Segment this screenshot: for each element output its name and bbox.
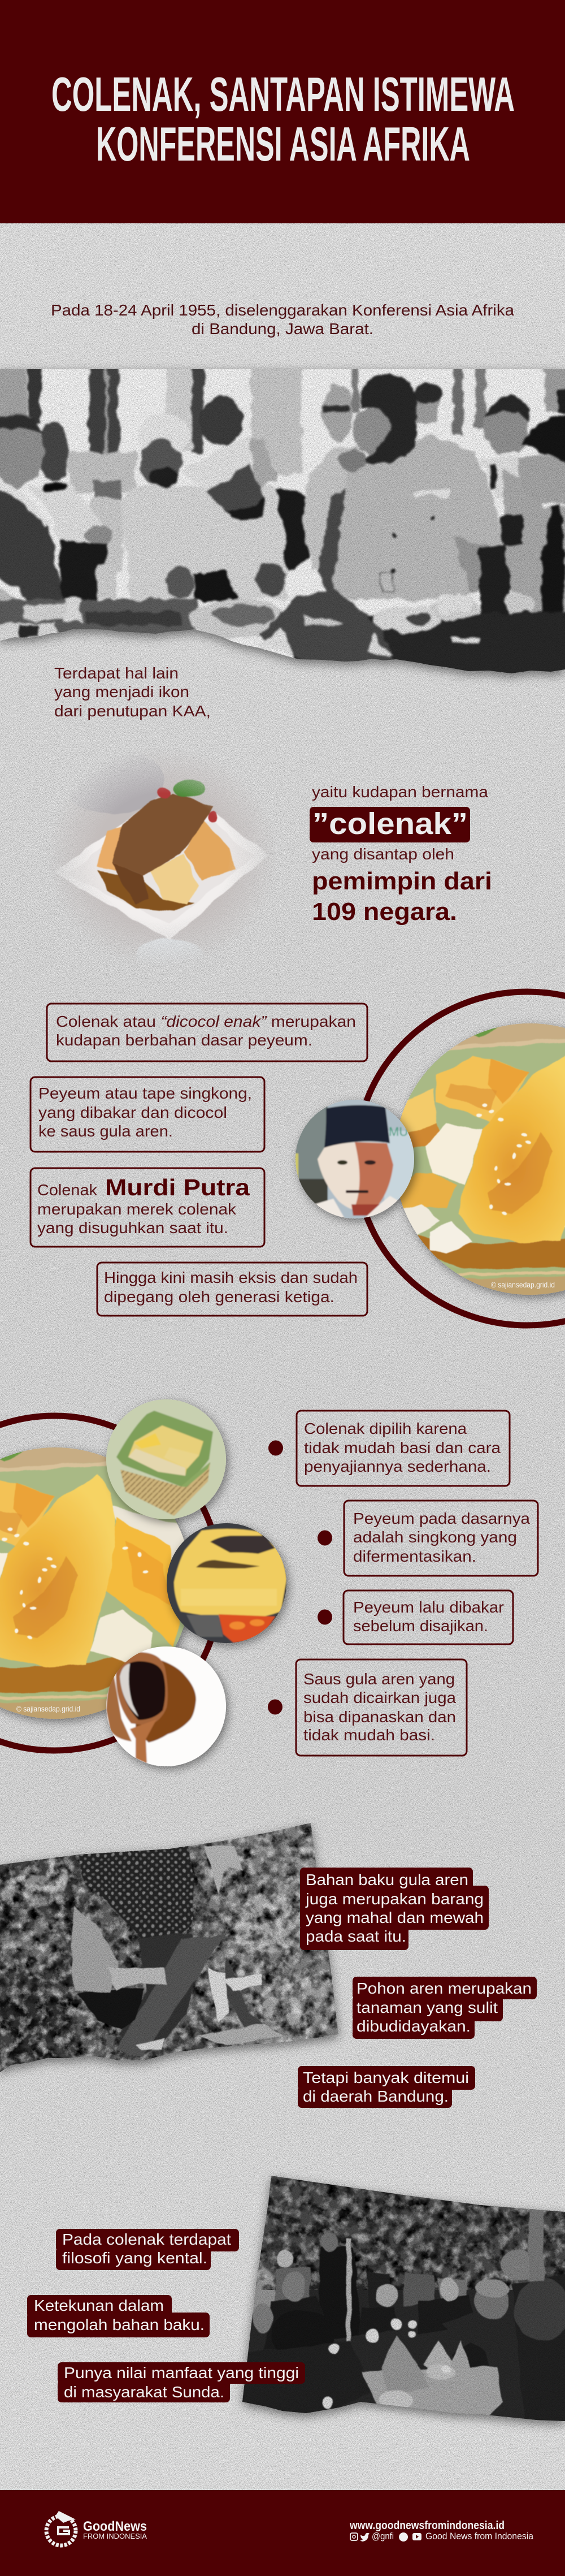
- text: a snack called colenak: yaitu kudapan bernama: [312, 783, 488, 801]
- callout: palm sugar is expensive: juga merupakan barang: [305, 1890, 484, 1908]
- callout: hard to cultivate: tanaman yang sulit: [357, 1999, 498, 2016]
- text: other icon of the closing: yang menjadi ikon: [54, 683, 189, 701]
- man in white robe and turban: [120, 414, 288, 599]
- dishes on the table: [0, 590, 565, 673]
- social media handles: @gnfi: [372, 2531, 394, 2542]
- box text: Murdi Putra: [37, 1174, 250, 1237]
- photo: palm sugar tapper on an aren tree: [0, 1821, 345, 2079]
- callout: palm sugar is expensive: yang mahal dan mewah: [306, 1909, 484, 1926]
- officer tasting colenak: [302, 375, 504, 599]
- box text: sauce: sudah dicairkan juga: [303, 1689, 456, 1706]
- fruit cluster: [79, 1840, 195, 1940]
- photo: colenak on a white plate with faded edge: [40, 735, 288, 978]
- man with headdress: [165, 435, 309, 600]
- box text: peyeum: [38, 1084, 252, 1140]
- header banner: [0, 0, 565, 223]
- callout: philosophy: [56, 2229, 239, 2270]
- standing men: [274, 2232, 466, 2344]
- callout: hard to cultivate: dibudidayakan.: [357, 2017, 471, 2035]
- callout: hard to cultivate: Pohon aren merupakan: [357, 1979, 532, 1997]
- ring around colenak photo, lower: [0, 1416, 221, 1751]
- box text: grilled: [353, 1598, 504, 1635]
- foliage texture: [0, 1815, 345, 2081]
- callout: diligence: Ketekunan dalam: [34, 2297, 164, 2314]
- logo: GoodNews from Indonesia: [46, 2511, 147, 2545]
- man with bow tie: [28, 423, 118, 602]
- box text: Murdi Putra: merupakan merek colenak: [37, 1200, 237, 1218]
- photo: colenak close-up, lower circle: [0, 1430, 208, 1736]
- box text: sauce: bisa dipanaskan dan: [303, 1708, 456, 1726]
- callout: found in Bandung: Tetapi banyak ditemui: [303, 2069, 469, 2086]
- photo credit: © sajiansedap.grid.id: [491, 1281, 555, 1289]
- callout: value to Sundanese society: di masyarakat Sunda.: [64, 2383, 224, 2401]
- photo: leaders at the conference table: [0, 351, 565, 690]
- box text: chosen because: [304, 1420, 501, 1475]
- website: www.goodnewsfromindonesia.id: [349, 2519, 505, 2532]
- box text: fermented cassava: difermentasikan.: [353, 1548, 476, 1565]
- box text: peyeum: yang dibakar dan dicocol: [38, 1104, 227, 1121]
- callout: value to Sundanese society: Punya nilai manfaat yang tinggi: [64, 2364, 299, 2381]
- intro text: di Bandung, Jawa Barat.: [192, 320, 373, 338]
- callout: philosophy: filosofi yang kental.: [62, 2249, 207, 2267]
- seated circle: [237, 2273, 475, 2417]
- outlined text boxes: what is colenak: [31, 1004, 367, 1316]
- box text: sauce: [303, 1670, 456, 1744]
- farmer: [71, 1905, 167, 2051]
- ring around colenak photo, upper: [356, 992, 565, 1325]
- social media handles: [350, 2531, 533, 2542]
- label: colenak: ”colenak”: [312, 807, 468, 841]
- logo: GoodNews from Indonesia: GoodNews: [83, 2519, 147, 2534]
- photo: spoon of palm sugar sauce: [102, 1640, 232, 1773]
- tree trunk and bamboo: [116, 1934, 271, 2058]
- callout: palm sugar is expensive: Bahan baku gula aren: [306, 1871, 468, 1888]
- intro text: [51, 301, 514, 338]
- callout: found in Bandung: di daerah Bandung.: [303, 2087, 449, 2105]
- box text: fermented cassava: [353, 1510, 530, 1565]
- text: a snack called colenak: yang disantap oleh: [312, 845, 454, 863]
- man with headband reaching across: [441, 2208, 565, 2431]
- text: other icon of the closing: dari penutupan KAA,: [54, 702, 211, 720]
- text: other icon of the closing: [54, 664, 211, 720]
- box text: third generation: dipegang oleh generasi ketiga.: [104, 1288, 334, 1306]
- bullet dots: [268, 1441, 332, 1714]
- callout: palm sugar is expensive: pada saat itu.: [306, 1927, 406, 1945]
- box text: third generation: Hingga kini masih eksis dan sudah: [104, 1269, 358, 1286]
- box text: grilled: Peyeum lalu dibakar: [353, 1598, 504, 1616]
- callout: diligence: mengolah bahan baku.: [34, 2316, 205, 2333]
- photo credit, lower: © sajiansedap.grid.id: [16, 1705, 80, 1713]
- box text: Murdi Putra: yang disuguhkan saat itu.: [37, 1219, 228, 1237]
- portrait of Murdi Putra founder: MU: [389, 1125, 408, 1139]
- box text: chosen because: Colenak dipilih karena: [304, 1420, 467, 1437]
- text: a snack called colenak: [310, 783, 492, 926]
- man in dark suit: [0, 412, 64, 602]
- box text: fermented cassava: adalah singkong yang: [353, 1528, 517, 1546]
- text: a snack called colenak: pemimpin dari: [312, 867, 492, 895]
- box text: third generation: [104, 1269, 358, 1306]
- text: a snack called colenak: 109 negara.: [312, 898, 457, 926]
- callout: value to Sundanese society: [58, 2362, 305, 2402]
- foliage texture: [237, 2171, 565, 2290]
- box text: chosen because: penyajiannya sederhana.: [304, 1458, 491, 1475]
- intro text: Pada 18-24 April 1955, diselenggarakan Konferensi Asia Afrika: [51, 301, 514, 319]
- box text: definition: Colenak atau “dicocol enak” merupakan: [56, 1013, 356, 1030]
- photo: colenak close-up, upper circle: [377, 1006, 565, 1312]
- callout: palm sugar is expensive: [300, 1868, 489, 1950]
- box text: grilled: sebelum disajikan.: [353, 1617, 488, 1635]
- footer banner: [0, 2490, 565, 2576]
- small background figure: [200, 397, 243, 445]
- social media handles: Good News from Indonesia: [425, 2531, 533, 2542]
- box text: definition: kudapan berbahan dasar peyeum.: [56, 1031, 312, 1049]
- photo: Sundanese people preparing offerings: [226, 2160, 565, 2437]
- outlined text boxes: why colenak: [296, 1411, 538, 1756]
- box text: definition: [56, 1013, 356, 1049]
- photo: peyeum in a bamboo basket: [102, 1394, 232, 1527]
- box text: Murdi Putra: Colenak: [37, 1181, 98, 1199]
- offerings: [322, 2318, 503, 2426]
- box text: chosen because: tidak mudah basi dan cara: [304, 1439, 501, 1456]
- callout: hard to cultivate: [353, 1977, 537, 2039]
- logo: GoodNews from Indonesia: FROM INDONESIA: [83, 2532, 147, 2540]
- box text: sauce: Saus gula aren yang: [303, 1670, 455, 1688]
- ferns: [198, 1968, 282, 2047]
- text: other icon of the closing: Terdapat hal lain: [54, 664, 179, 682]
- callout: diligence: [27, 2295, 210, 2337]
- box text: peyeum: ke saus gula aren.: [38, 1122, 173, 1140]
- callout: philosophy: Pada colenak terdapat: [62, 2231, 231, 2248]
- man behind officer and man on the right: [480, 387, 565, 622]
- photo: grilled peyeum over coals: [161, 1518, 294, 1648]
- box text: sauce: tidak mudah basi.: [303, 1726, 435, 1744]
- box text: Murdi Putra: Murdi Putra: [105, 1174, 250, 1200]
- title: [51, 68, 515, 171]
- portrait of Murdi Putra founder: [294, 1097, 418, 1221]
- callout: found in Bandung: [298, 2066, 475, 2108]
- box text: fermented cassava: Peyeum pada dasarnya: [353, 1510, 530, 1527]
- box text: peyeum: Peyeum atau tape singkong,: [38, 1084, 252, 1102]
